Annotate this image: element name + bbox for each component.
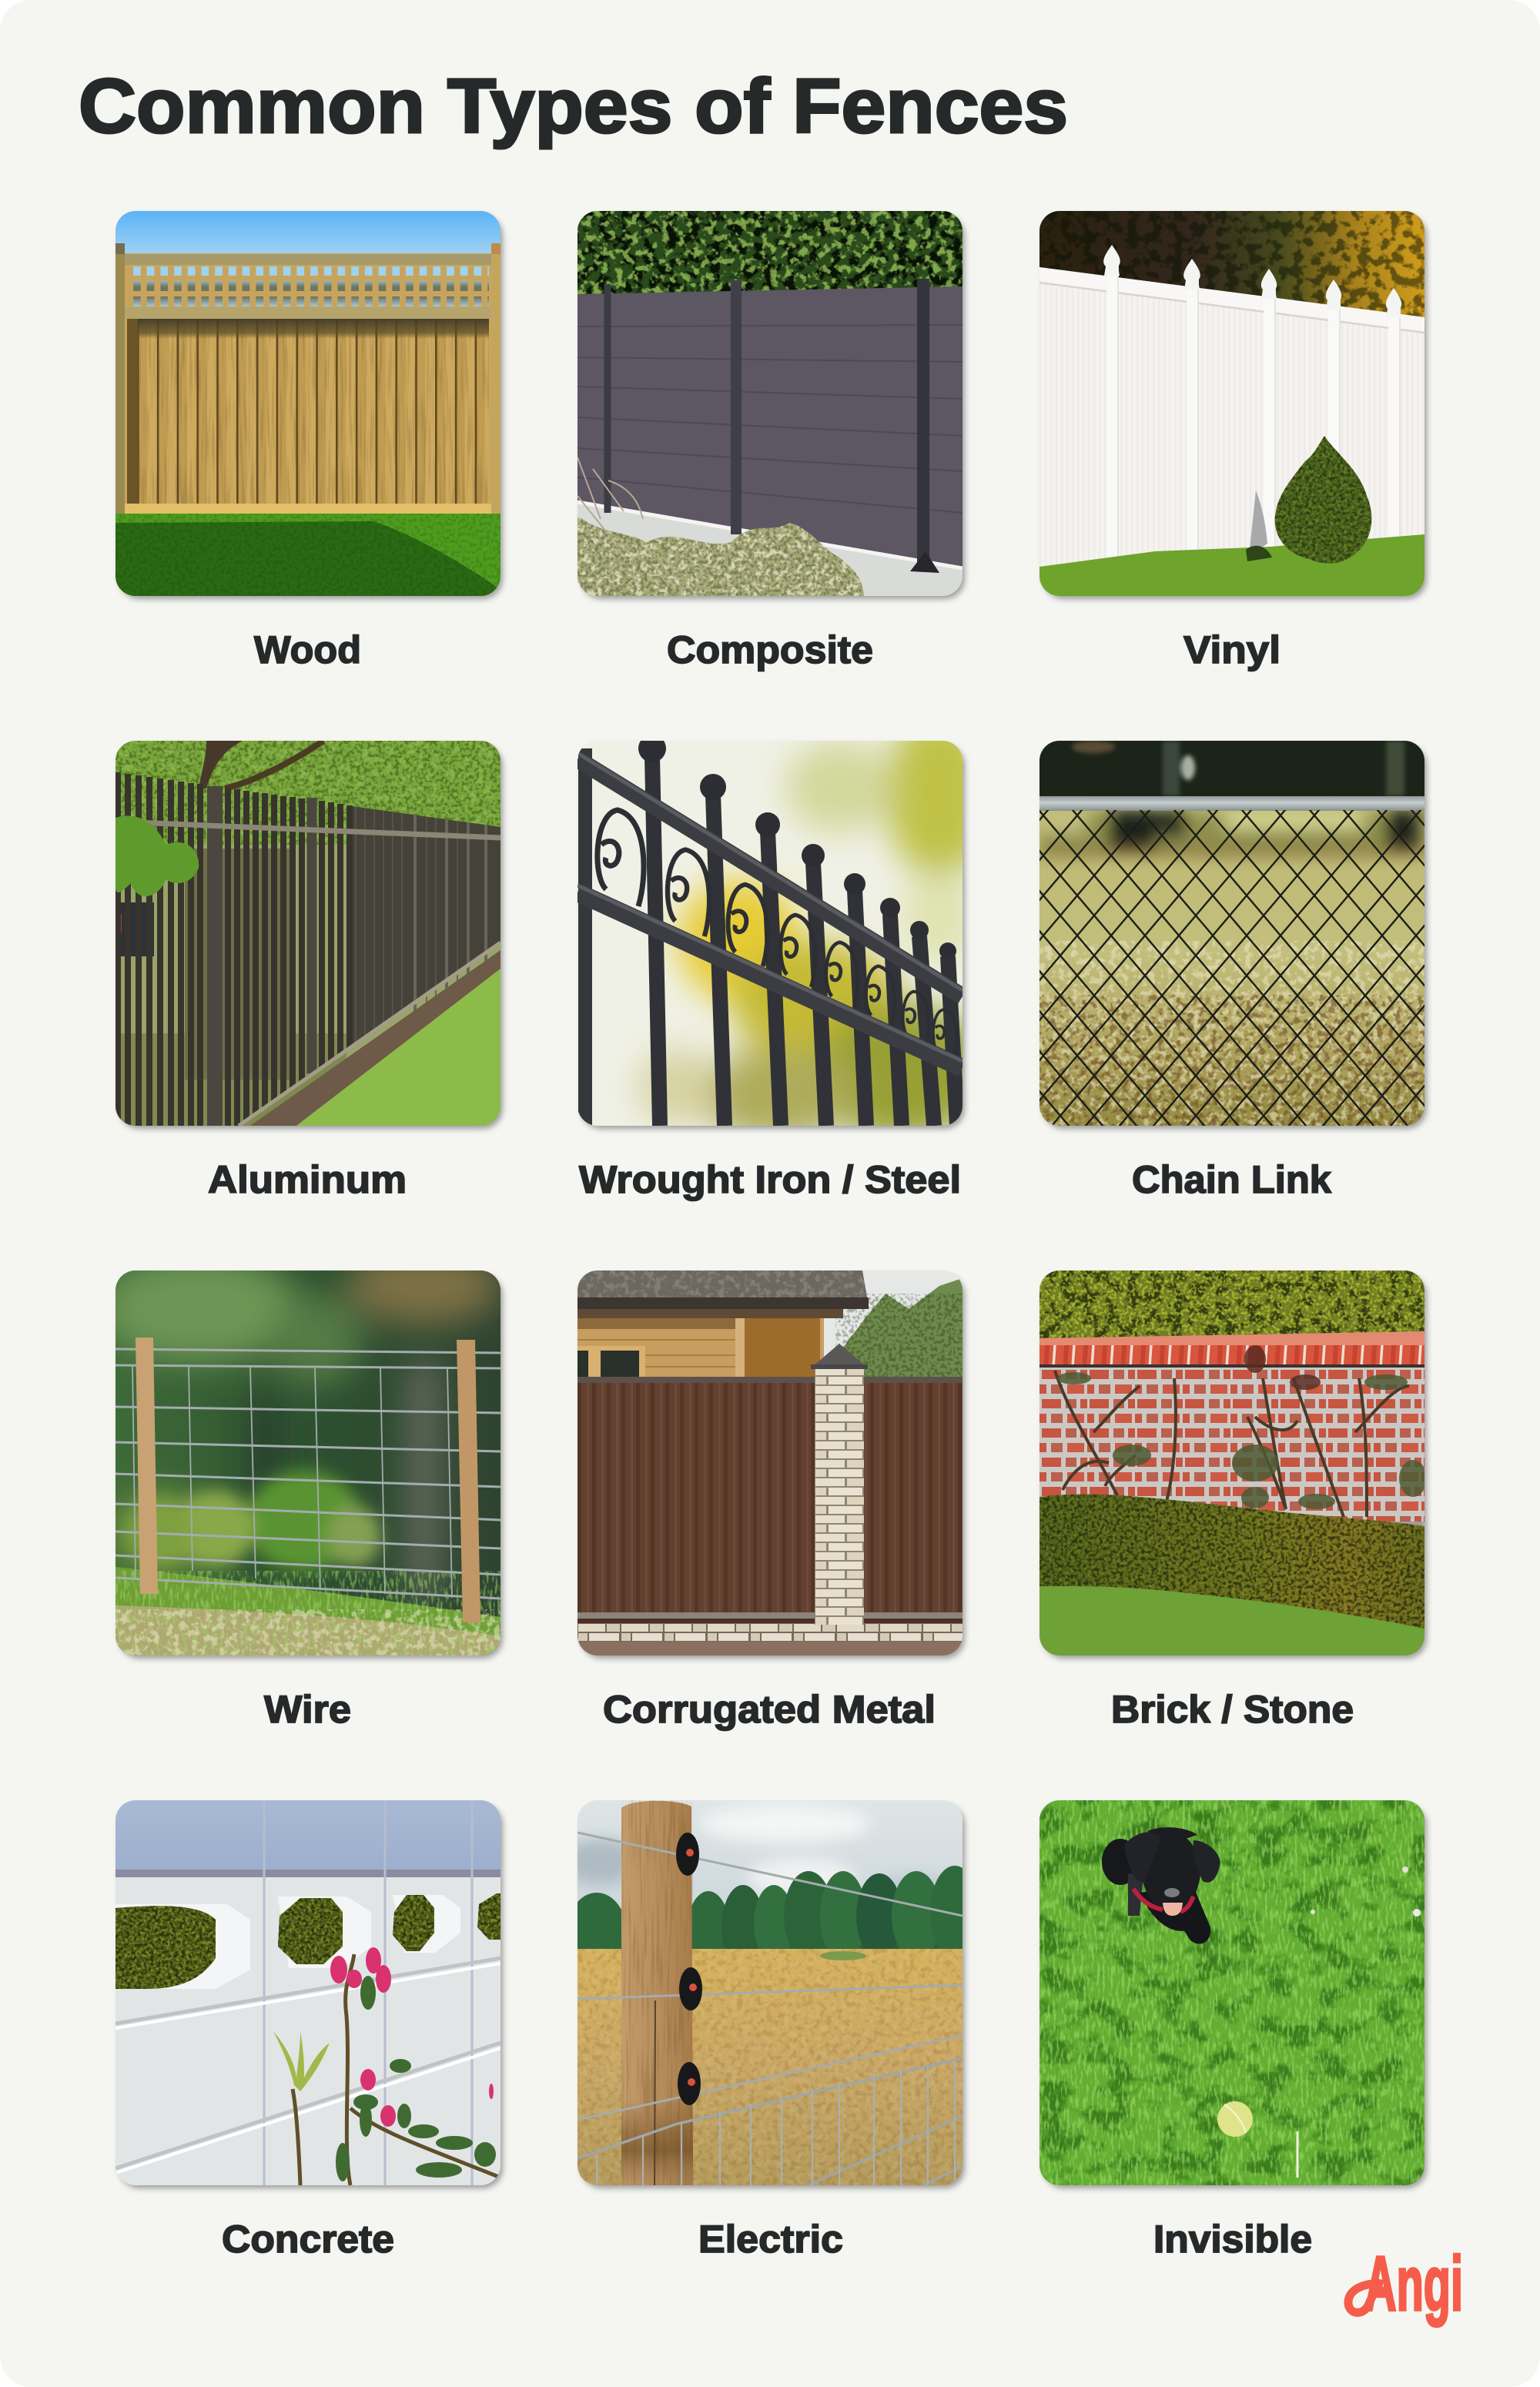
label: vinyl: Vinyl — [1183, 628, 1281, 671]
photo: electric fence — [562, 1800, 979, 2185]
photo: wire fence — [100, 1247, 500, 1656]
card: concrete — [116, 1800, 503, 2261]
card: brick / stone — [1040, 1270, 1427, 1731]
photo: brick wall and hedge — [1040, 1270, 1427, 1656]
photo: concrete block wall — [116, 1800, 500, 2185]
card: invisible — [1040, 1800, 1427, 2261]
card: aluminum — [116, 741, 503, 1201]
label: brick / stone: Brick / Stone — [1111, 1688, 1354, 1731]
label: chain link: Chain Link — [1132, 1158, 1331, 1201]
label: aluminum: Aluminum — [208, 1158, 407, 1201]
title: Common Types of Fences — [79, 63, 1068, 149]
logo: Angi: Angi — [1364, 2241, 1463, 2327]
label: wood: Wood — [254, 628, 361, 671]
photo: wood fence with lattice — [116, 211, 500, 596]
card: wood — [116, 211, 503, 671]
photo: wrought iron fence — [578, 710, 993, 1141]
card: vinyl — [1040, 211, 1427, 671]
card: electric — [562, 1800, 979, 2261]
label: electric: Electric — [698, 2218, 843, 2261]
card: corrugated metal — [578, 1270, 965, 1731]
photo: dog in grass with tennis ball — [1040, 1800, 1424, 2185]
card: wrought iron — [578, 710, 993, 1201]
card: composite — [578, 211, 965, 671]
photo: chain link fence — [1040, 741, 1424, 1126]
label: wrought iron / steel: Wrought Iron / Steel — [579, 1158, 961, 1201]
label: composite: Composite — [667, 628, 873, 671]
label: concrete: Concrete — [222, 2218, 394, 2261]
card: chain link — [1040, 741, 1427, 1201]
photo: composite fence — [578, 211, 962, 596]
photo: corrugated metal fence — [578, 1270, 962, 1656]
logo: Angi — [1348, 2241, 1463, 2327]
photo: white vinyl fence — [1040, 211, 1424, 596]
label: invisible: Invisible — [1153, 2218, 1312, 2261]
label: wire: Wire — [264, 1688, 351, 1731]
card: wire — [100, 1247, 503, 1731]
photo: aluminum fence — [116, 741, 500, 1126]
label: corrugated metal: Corrugated Metal — [603, 1688, 936, 1731]
